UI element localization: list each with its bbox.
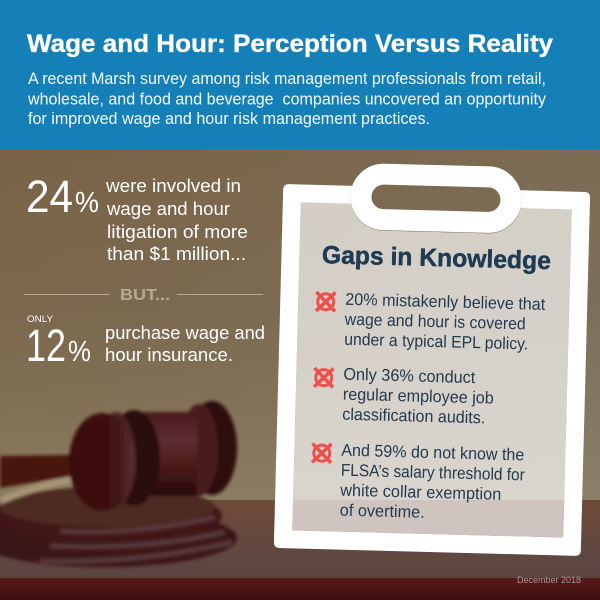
header band: [0, 0, 600, 149]
photo background: wall and table: [0, 149, 600, 600]
only label: ONLY: [27, 314, 53, 324]
statistic: 12 percent: [26, 314, 265, 371]
gap item 2: [313, 364, 495, 428]
12% figure: 12: [26, 320, 66, 371]
gavel illustration: [0, 401, 237, 567]
24% figure: 24: [26, 171, 73, 222]
intro text: [27, 70, 547, 128]
clipboard clip: [360, 174, 512, 223]
24% figure: [26, 171, 99, 222]
date footer: December 2018: [517, 575, 581, 585]
intro text: for improved wage and hour risk management practices.: [28, 110, 430, 128]
gap item 1: under a typical EPL policy.: [344, 330, 528, 354]
24% description: than $1 million...: [107, 243, 246, 264]
block highlights: [40, 517, 232, 561]
gap item 2: Only 36% conduct: [343, 365, 476, 387]
gap item 1: 20% mistakenly believe that: [345, 290, 546, 314]
24% description: were involved in: [105, 175, 241, 196]
gap item 3: And 59% do not know the: [341, 441, 525, 464]
24% figure: %: [75, 187, 99, 219]
icon: red crossed circle: [314, 368, 334, 387]
12% description: purchase wage and: [105, 322, 265, 343]
gavel head: [69, 401, 237, 511]
24% description: [105, 175, 248, 264]
gap item 2: regular employee job: [343, 385, 494, 408]
24% description: wage and hour: [106, 198, 230, 219]
icon: red crossed circle: [312, 443, 332, 463]
panel heading: Gaps in Knowledge: [322, 241, 551, 275]
intro text: wholesale, and food and beverage companies uncovered an opportunity: [27, 90, 547, 108]
gap item 3: white collar exemption: [339, 481, 502, 504]
24% description: litigation of more: [107, 221, 248, 242]
but divider: BUT...: [120, 287, 170, 304]
statistic: 24 percent: [26, 171, 248, 264]
gavel handle: [0, 455, 72, 488]
clipboard panel: [274, 172, 591, 556]
gap item 3: FLSA’s salary threshold for: [341, 461, 525, 484]
gap item 1: [315, 289, 546, 354]
gap item 2: classification audits.: [342, 405, 486, 427]
gap item 3: [311, 440, 526, 524]
title: Wage and Hour: Perception Versus Reality: [27, 30, 553, 58]
icon: red crossed circle: [316, 292, 335, 311]
gavel sounding block: [0, 480, 237, 567]
intro text: A recent Marsh survey among risk management professionals from retail,: [28, 70, 546, 88]
12% description: hour insurance.: [105, 344, 233, 365]
clipboard body: [274, 184, 590, 556]
gap item 3: of overtime.: [340, 501, 425, 522]
gap item 1: wage and hour is covered: [344, 310, 526, 333]
12% figure: %: [68, 336, 91, 368]
12% description: [105, 322, 265, 365]
